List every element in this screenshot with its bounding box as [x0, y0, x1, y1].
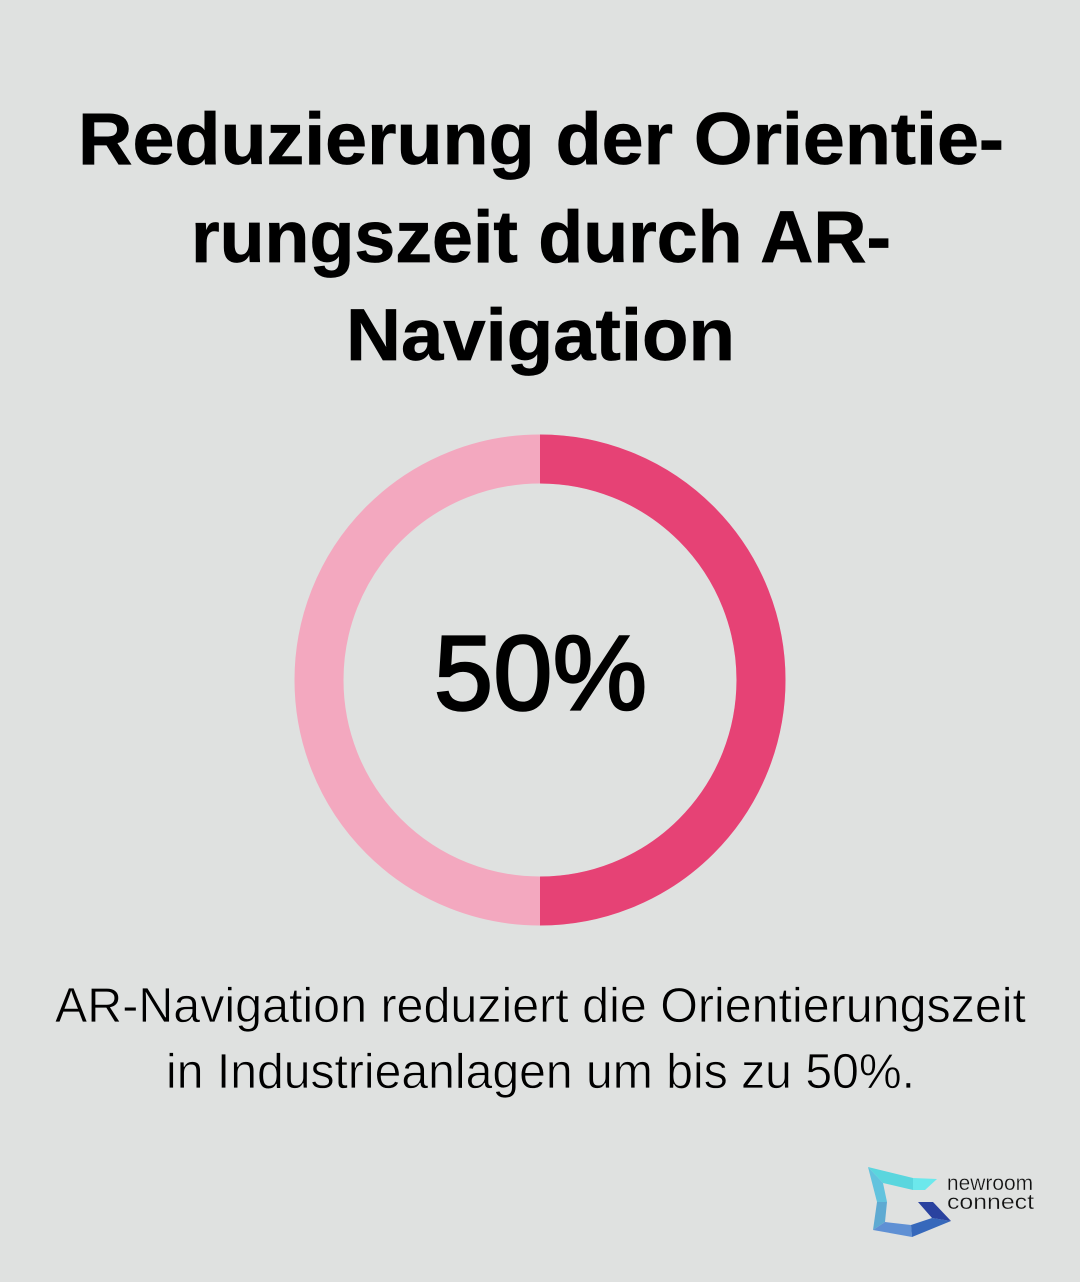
title: Navigation: [346, 295, 735, 376]
logo: newroom connect: [868, 1167, 1034, 1237]
description text: AR-Navigation reduziert die Orientierungszeit: [55, 979, 1026, 1033]
description text: [55, 979, 1026, 1099]
logo wordmark: [947, 1172, 1034, 1214]
donut value: 50%: 50%: [434, 614, 647, 732]
title: [78, 99, 1004, 376]
logo icon: [868, 1167, 951, 1237]
logo wordmark: connect: [947, 1191, 1034, 1214]
description text: in Industrieanlagen um bis zu 50%.: [166, 1045, 915, 1099]
title: Reduzierung der Orientie-: [78, 99, 1004, 180]
logo wordmark: newroom: [947, 1172, 1033, 1195]
title: rungszeit durch AR-: [191, 197, 891, 278]
donut chart: 50%: [319, 459, 761, 901]
